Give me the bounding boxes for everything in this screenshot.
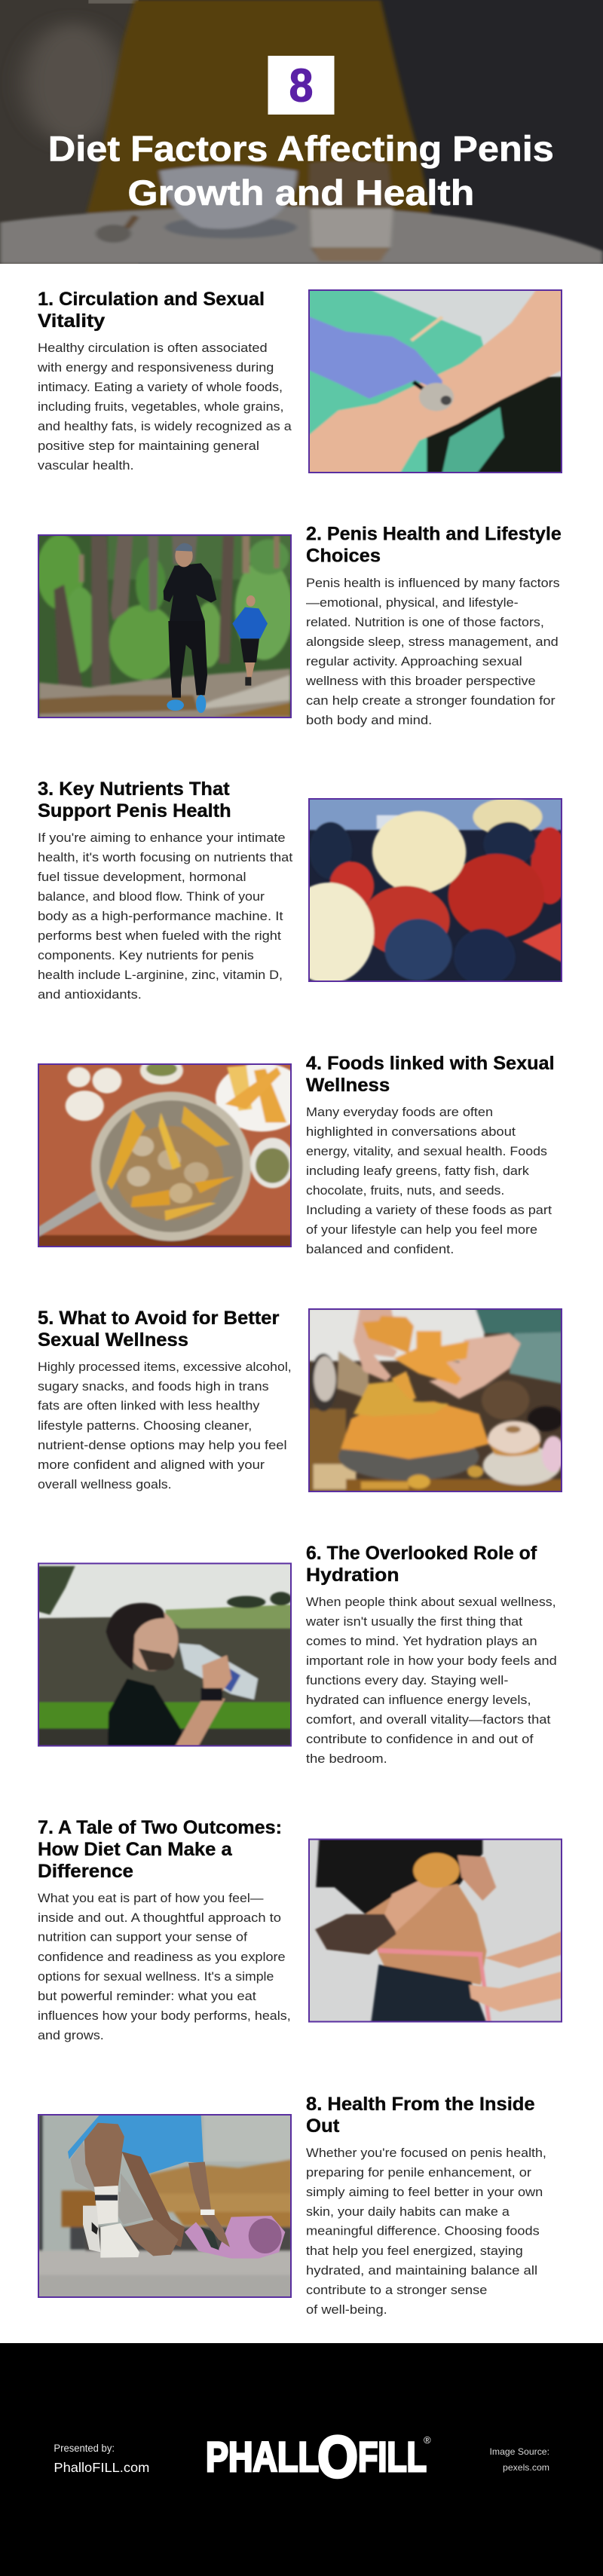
body text 3: balance, and blood flow. Think of your: [38, 890, 265, 904]
body text 4: balanced and confident.: [306, 1243, 454, 1256]
logo: PHALL: [206, 2433, 319, 2480]
heading 7: How Diet Can Make a: [38, 1839, 233, 1860]
heading 1: Vitality: [38, 311, 105, 332]
photo: man drinking water from bottle: [38, 1563, 292, 1747]
body text 8: meaningful difference. Choosing foods: [306, 2225, 540, 2238]
body text 5: lifestyle patterns. Choosing cleaner,: [38, 1419, 252, 1433]
photo: man rolling yoga mat: [38, 2114, 292, 2298]
body text 2: [305, 577, 560, 727]
panel: section 4 foods: [38, 1053, 555, 1256]
body text 3: performs best when fueled with the right: [38, 929, 281, 943]
panel: section 5 what to avoid: [38, 1308, 565, 1492]
heading 5: Sexual Wellness: [38, 1329, 188, 1351]
heading 8: Out: [306, 2116, 340, 2137]
body text 8: skin, your daily habits can make a: [306, 2205, 510, 2219]
body text 6: the bedroom.: [306, 1752, 387, 1766]
image source credit: [490, 2446, 549, 2473]
title: Diet Factors Affecting Penis: [48, 128, 554, 168]
body text 2: alongside sleep, stress management, and: [306, 635, 559, 649]
body text 1: intimacy. Eating a variety of whole foods,: [38, 381, 283, 394]
photo: gloved hand with stethoscope on arm: [308, 289, 562, 473]
body text 2: Penis health is influenced by many factors: [306, 577, 560, 590]
body text 1: [37, 341, 292, 473]
body text 8: simply aiming to feel better in your own: [306, 2186, 543, 2199]
body text 4: including leafy greens, fatty fish, dark: [306, 1164, 530, 1178]
body text 6: water isn't usually the first thing that: [305, 1615, 523, 1629]
title: [48, 128, 554, 213]
heading 7: 7. A Tale of Two Outcomes:: [38, 1817, 282, 1838]
body text 6: When people think about sexual wellness,: [306, 1595, 556, 1609]
panel: section 6 hydration: [38, 1543, 557, 1766]
body text 7: options for sexual wellness. It's a simple: [38, 1970, 274, 1984]
body text 8: [306, 2146, 546, 2317]
body text 3: components. Key nutrients for penis: [38, 949, 254, 962]
body text 3: [38, 831, 293, 1002]
body text 6: comes to mind. Yet hydration plays an: [306, 1635, 537, 1648]
body text 6: contribute to confidence in and out of: [306, 1733, 534, 1746]
body text 5: more confident and aligned with your: [38, 1458, 265, 1472]
body text 2: can help create a stronger foundation for: [306, 694, 556, 708]
footer: [0, 2343, 603, 2576]
body text 7: nutrition can support your sense of: [38, 1931, 247, 1944]
body text 2: both body and mind.: [306, 714, 432, 727]
image source credit: pexels.com: [503, 2462, 549, 2473]
body text 8: preparing for penile enhancement, or: [306, 2166, 532, 2180]
presented by credit: Presented by:: [54, 2443, 115, 2454]
logo: FILL: [358, 2433, 427, 2480]
heading 2: [306, 524, 562, 567]
body text 6: [305, 1595, 557, 1766]
body text 3: body as a high-performance machine. It: [38, 910, 283, 923]
presented by credit: [54, 2443, 149, 2475]
body text 2: regular activity. Approaching sexual: [306, 655, 522, 668]
header banner: [0, 0, 603, 264]
photo: belly being measured with tape: [308, 1839, 562, 2023]
heading 5: 5. What to Avoid for Better: [38, 1308, 280, 1329]
body text 3: and antioxidants.: [38, 988, 142, 1002]
heading 8: [306, 2094, 535, 2137]
body text 7: but powerful reminder: what you eat: [38, 1990, 256, 2003]
body text 4: [306, 1106, 552, 1256]
body text 8: contribute to a stronger sense: [306, 2284, 487, 2297]
heading 2: 2. Penis Health and Lifestyle: [306, 524, 562, 545]
body text 4: chocolate, fruits, nuts, and seeds.: [306, 1184, 504, 1198]
body text 7: [38, 1892, 291, 2042]
body text 7: and grows.: [38, 2029, 104, 2042]
heading 1: 1. Circulation and Sexual: [38, 289, 265, 310]
photo: pan of potatoes and mushrooms: [38, 1057, 308, 1247]
body text 7: confidence and readiness as you explore: [38, 1950, 286, 1964]
body text 3: health include L-arginine, zinc, vitamin D,: [38, 968, 283, 982]
photo: bananas, strawberries, blueberries: [283, 798, 569, 986]
panel: section 7 two outcomes: [38, 1817, 562, 2042]
body text 3: If you're aiming to enhance your intimate: [38, 831, 286, 845]
body text 4: of your lifestyle can help you feel more: [306, 1223, 537, 1237]
body text 1: and healthy fats, is widely recognized as a: [38, 420, 292, 433]
heading 6: Hydration: [306, 1565, 399, 1586]
title: Growth and Health: [127, 173, 474, 213]
body text 7: inside and out. A thoughtful approach to: [38, 1911, 281, 1925]
body text 5: nutrient-dense options may help you feel: [38, 1439, 287, 1452]
heading 7: [38, 1817, 282, 1882]
heading 3: [38, 779, 231, 821]
body text 1: with energy and responsiveness during: [37, 361, 274, 375]
heading 5: [38, 1308, 280, 1351]
presented by credit: PhalloFILL.com: [54, 2460, 149, 2475]
body text 3: health, it's worth focusing on nutrients that: [38, 851, 293, 864]
body text 4: highlighted in conversations about: [306, 1125, 516, 1139]
image source credit: Image Source:: [490, 2446, 549, 2457]
heading 3: Support Penis Health: [38, 800, 231, 821]
heading 4: 4. Foods linked with Sexual: [306, 1053, 555, 1074]
panel: section 1 circulation: [37, 289, 562, 473]
body text 7: What you eat is part of how you feel—: [38, 1892, 264, 1905]
header photo: person at table with bowl and glass: [0, 0, 603, 264]
body text 2: related. Nutrition is one of those factors,: [306, 616, 544, 629]
body text 5: fats are often linked with less healthy: [38, 1400, 260, 1413]
number badge: 8: [289, 60, 314, 112]
body text 1: Healthy circulation is often associated: [38, 341, 268, 355]
heading 6: 6. The Overlooked Role of: [306, 1543, 537, 1564]
body text 2: —emotional, physical, and lifestyle-: [306, 596, 519, 610]
body text 8: of well-being.: [306, 2303, 387, 2317]
heading 4: [306, 1053, 555, 1096]
body text 6: important role in how your body feels and: [306, 1654, 557, 1668]
body text 8: that help you feel energized, staying: [306, 2244, 523, 2258]
logo: [206, 2424, 431, 2490]
body text 6: hydrated can influence energy levels,: [306, 1693, 531, 1707]
body text 5: [38, 1360, 292, 1491]
body text 1: including fruits, vegetables, whole grains,: [38, 400, 283, 414]
panel: section 2 lifestyle: [36, 524, 562, 727]
number badge: [268, 56, 335, 115]
heading 7: Difference: [38, 1861, 133, 1882]
heading 6: [306, 1543, 537, 1586]
logo: ®: [424, 2434, 431, 2446]
heading 2: Choices: [306, 546, 381, 567]
heading 1: [38, 289, 265, 332]
body text 4: Including a variety of these foods as part: [306, 1204, 552, 1217]
body text 5: sugary snacks, and foods high in trans: [38, 1380, 269, 1394]
body text 4: energy, vitality, and sexual health. Foods: [306, 1145, 547, 1158]
photo: hands with chips, bowl and donuts: [308, 1308, 565, 1492]
photo: two men running in forest: [36, 534, 292, 718]
body text 4: Many everyday foods are often: [306, 1106, 493, 1119]
logo: O: [317, 2424, 358, 2490]
body text 2: wellness with this broader perspective: [305, 675, 536, 688]
body text 6: comfort, and overall vitality—factors that: [306, 1713, 551, 1727]
body text 8: Whether you're focused on penis health,: [306, 2146, 546, 2160]
panel: section 8 inside out: [38, 2094, 546, 2317]
heading 8: 8. Health From the Inside: [306, 2094, 535, 2115]
body text 1: positive step for maintaining general: [38, 439, 259, 453]
heading 3: 3. Key Nutrients That: [38, 779, 230, 800]
body text 1: vascular health.: [38, 459, 134, 473]
body text 7: influences how your body performs, heals,: [38, 2009, 291, 2023]
body text 8: hydrated, and maintaining balance all: [306, 2264, 537, 2278]
panel: section 3 nutrients: [38, 779, 569, 1002]
body text 3: fuel tissue development, hormonal: [38, 870, 246, 884]
body text 5: Highly processed items, excessive alcohol,: [38, 1360, 292, 1374]
heading 4: Wellness: [306, 1075, 390, 1096]
body text 5: overall wellness goals.: [38, 1478, 172, 1491]
body text 6: functions every day. Staying well-: [306, 1674, 508, 1687]
